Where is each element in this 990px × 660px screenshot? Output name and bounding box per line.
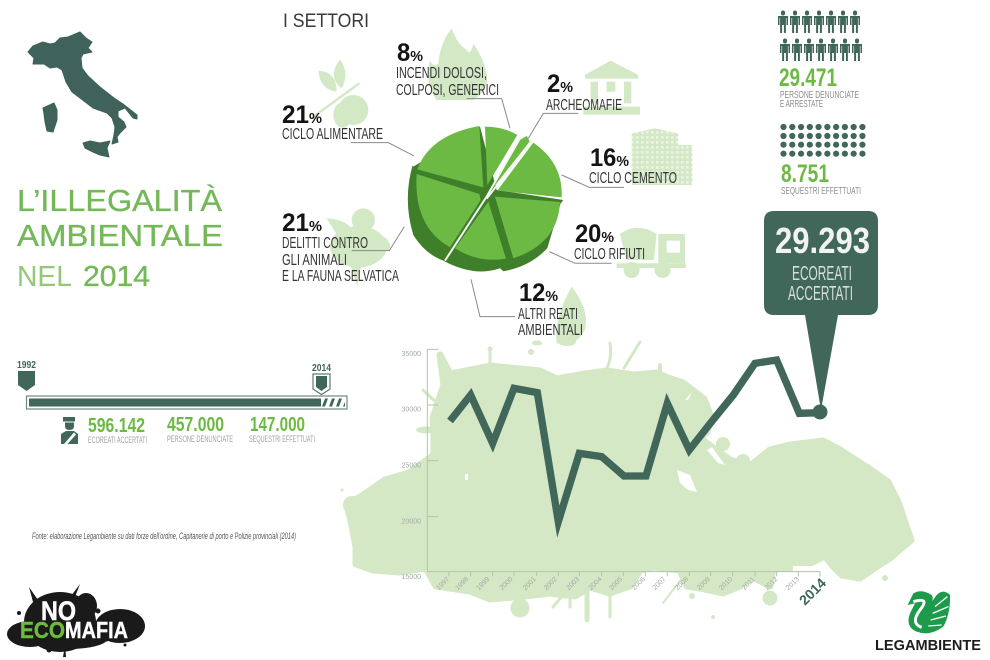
label: delitti contro gli animali: GLI ANIMALI	[282, 252, 347, 269]
axes	[427, 349, 820, 577]
marker: 2014	[313, 374, 330, 394]
stat: ecoreati accertati: ECOREATI ACCERTATI	[88, 435, 147, 445]
panel: seizures	[781, 127, 862, 197]
label: ciclo alimentare: 21%	[282, 101, 322, 129]
axis values: 35000	[402, 351, 421, 358]
year labels: 1997	[435, 576, 451, 592]
pie chart	[408, 126, 563, 272]
year label: 2014: 2014	[312, 362, 331, 374]
logo: no ecomafia: ECO	[20, 617, 65, 643]
label: delitti contro gli animali: E LA FAUNA SELVATICA	[282, 268, 399, 285]
label: ciclo rifiuti: CICLO RIFIUTI	[574, 246, 645, 263]
label: ciclo alimentare	[282, 101, 383, 143]
axis values	[402, 351, 421, 581]
year labels: 2008	[674, 576, 690, 592]
slice: archeomafie	[488, 136, 530, 193]
axis values: 30000	[402, 407, 421, 414]
callout: 29.293 ecocrimes	[764, 211, 878, 410]
year labels: 2004	[588, 576, 604, 592]
icon: swan	[908, 591, 950, 633]
icon: buildings	[632, 128, 692, 185]
label: ciclo rifiuti	[574, 220, 645, 263]
year labels: 2012	[764, 576, 780, 592]
year labels: 2007	[652, 576, 668, 592]
year labels: 2000	[499, 576, 515, 592]
year labels: 1998	[454, 576, 470, 592]
title: 2014	[83, 261, 150, 293]
timeline bar	[26, 396, 347, 409]
label: archeomafie	[546, 70, 622, 114]
year labels: 2010	[718, 576, 734, 592]
axis values: 15000	[402, 574, 421, 581]
stat: sequestri effettuati: 147.000	[250, 414, 305, 436]
stat: ecoreati accertati	[88, 415, 147, 445]
caption: persons: E ARRESTATE	[780, 98, 823, 110]
panel: sector pie chart with icons and labels	[282, 28, 692, 344]
year labels: 1999	[475, 576, 491, 592]
line chart: ecocrimes 1997-2014	[402, 349, 829, 608]
label: delitti contro gli animali	[282, 209, 399, 285]
label: ciclo cemento: 16%	[590, 144, 629, 172]
icon: turtle	[327, 208, 391, 287]
callout: 29.293 ecocrimes: 29.293	[775, 220, 870, 261]
stat: sequestri effettuati	[249, 414, 315, 444]
year labels: 2006	[631, 576, 647, 592]
stat: ecoreati accertati: 596.142	[88, 415, 145, 437]
white slice gaps	[445, 138, 532, 261]
title: AMBIENTALE	[17, 218, 223, 253]
label: delitti contro gli animali: DELITTI CONTRO	[282, 235, 368, 252]
caption: persons	[780, 89, 859, 110]
slice: incendi	[485, 127, 517, 185]
label: delitti contro gli animali: 21%	[282, 209, 322, 237]
label: altri reati ambientali	[518, 279, 583, 339]
label: archeomafie: 2%	[547, 70, 573, 98]
year labels: 2002	[543, 576, 559, 592]
label: archeomafie: ARCHEOMAFIE	[546, 97, 622, 114]
label: incendi	[396, 39, 499, 99]
number: persons: 29.471	[779, 64, 837, 92]
year labels: 2009	[696, 576, 712, 592]
label: ciclo cemento: CICLO CEMENTO	[589, 170, 677, 187]
label: incendi: INCENDI DOLOSI,	[396, 65, 487, 82]
year labels: 2014	[796, 575, 829, 608]
icon: leaf	[556, 287, 586, 344]
chart background: ink splash	[340, 338, 911, 620]
title	[17, 183, 223, 293]
slice: altri reati	[455, 202, 506, 260]
year labels: 2003	[565, 576, 581, 592]
label: incendi: 8%	[397, 39, 423, 67]
year labels: 2013	[785, 576, 801, 592]
stat: persone denunciate: PERSONE DENUNCIATE	[167, 434, 233, 444]
icon: flame	[428, 28, 487, 100]
axis values: 20000	[402, 518, 421, 525]
leader lines	[351, 99, 624, 317]
callout: 29.293 ecocrimes: ACCERTATI	[788, 283, 853, 305]
caption: persons: PERSONE DENUNCIATE	[780, 89, 859, 101]
icon: olive branch	[313, 59, 368, 128]
title: L’ILLEGALITÀ	[17, 183, 222, 218]
axis values: 25000	[402, 463, 421, 470]
sector icons	[313, 28, 692, 344]
logo: no ecomafia	[7, 584, 145, 657]
icon: temple	[583, 61, 640, 115]
number: seizures: 8.751	[781, 160, 829, 188]
splash drips	[340, 338, 888, 620]
stat: sequestri effettuati: SEQUESTRI EFFETTUATI	[249, 434, 315, 444]
panel: persons reported	[778, 10, 862, 110]
icon: rows of people	[778, 10, 862, 61]
logo: no ecomafia: MAFIA	[65, 617, 128, 643]
year labels	[435, 575, 829, 608]
slice: ciclo alimentare	[417, 126, 483, 187]
data line	[450, 360, 820, 522]
panel: timeline 1992-2014	[17, 359, 347, 445]
white gaps inside splash	[465, 392, 820, 572]
label: ciclo alimentare: CICLO ALIMENTARE	[282, 126, 383, 143]
source note: Fonte: elaborazione Legambiente su dati forze dell'ordine, Capitanerie di porto e Polizie provinciali (2014)	[32, 531, 296, 541]
caption: seizures: SEQUESTRI EFFETTUATI	[781, 185, 861, 197]
stat: persone denunciate	[167, 414, 233, 444]
year labels: 2011	[741, 576, 757, 592]
label: ciclo rifiuti: 20%	[575, 220, 614, 248]
slice: ciclo rifiuti	[495, 197, 560, 258]
icon: police officer	[61, 417, 78, 444]
year labels: 2005	[608, 576, 624, 592]
label: ciclo cemento	[589, 144, 677, 187]
marker: 2014 point	[812, 404, 828, 420]
label: altri reati ambientali: ALTRI REATI	[518, 306, 578, 323]
slice: ciclo cemento	[497, 143, 562, 197]
title: NEL	[17, 261, 72, 293]
callout: 29.293 ecocrimes: ECOREATI	[792, 263, 852, 285]
label: altri reati ambientali: 12%	[519, 279, 558, 307]
logo: legambiente: LEGAMBIENTE	[875, 637, 981, 654]
heading: i settori: I SETTORI	[283, 11, 369, 32]
logo: legambiente	[875, 591, 981, 654]
map of Italy	[28, 32, 137, 157]
year labels: 2001	[522, 576, 538, 592]
pie depth	[408, 127, 563, 272]
stat: persone denunciate: 457.000	[167, 414, 224, 436]
icon: dot matrix	[784, 127, 862, 154]
logo: no ecomafia: NO	[41, 596, 76, 626]
label: incendi: COLPOSI, GENERICI	[396, 82, 499, 99]
label: altri reati ambientali: AMBIENTALI	[518, 322, 583, 339]
slice: delitti contro gli animali	[416, 174, 481, 247]
icon: dump truck	[617, 228, 686, 278]
marker: 1992	[18, 371, 35, 391]
year label: 1992: 1992	[17, 359, 36, 371]
